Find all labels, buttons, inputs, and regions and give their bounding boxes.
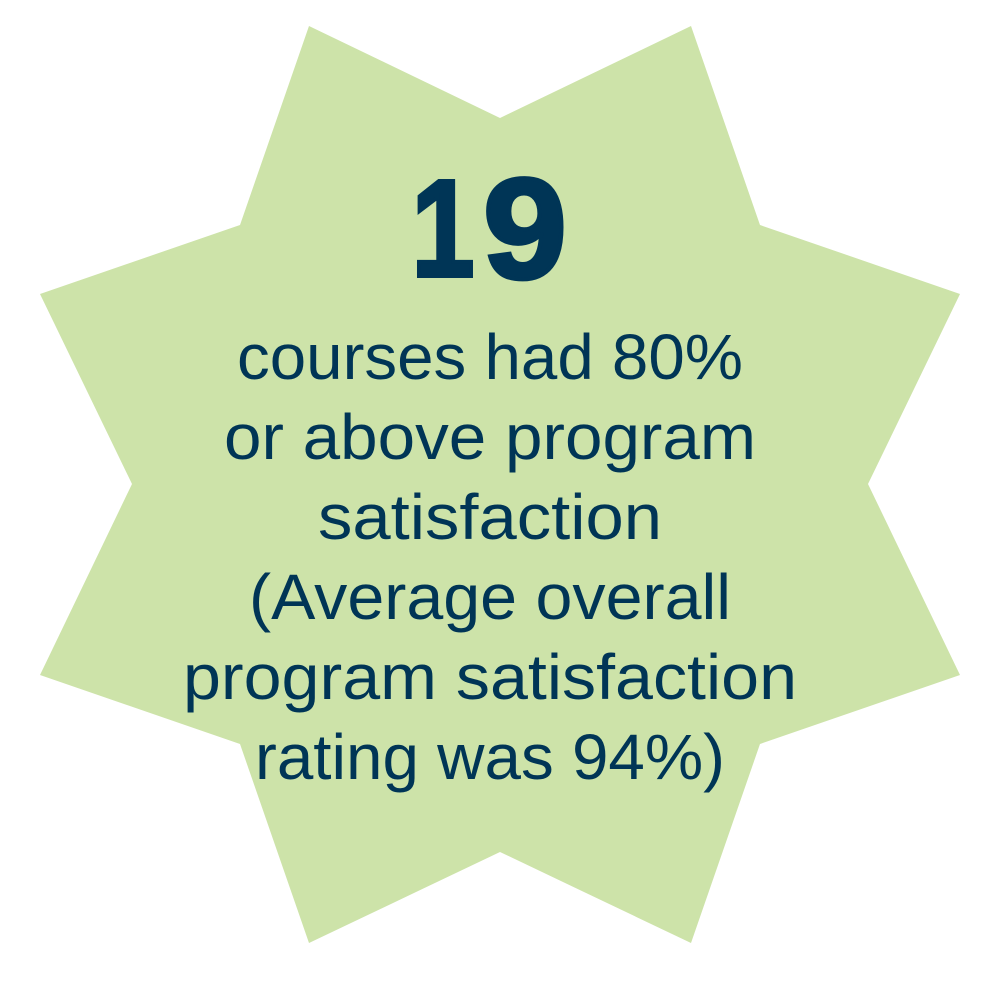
big number 19 xyxy=(412,150,567,309)
description text xyxy=(183,321,797,793)
big number 19: 9 xyxy=(483,150,567,309)
description text: satisfaction xyxy=(318,481,662,553)
description text: (Average overall xyxy=(249,561,731,633)
description text: or above program xyxy=(224,401,756,473)
description text: courses had 80% xyxy=(237,321,743,393)
big number 19: 1 xyxy=(412,152,474,306)
description text: rating was 94%) xyxy=(255,721,725,793)
description text: program satisfaction xyxy=(183,641,797,713)
